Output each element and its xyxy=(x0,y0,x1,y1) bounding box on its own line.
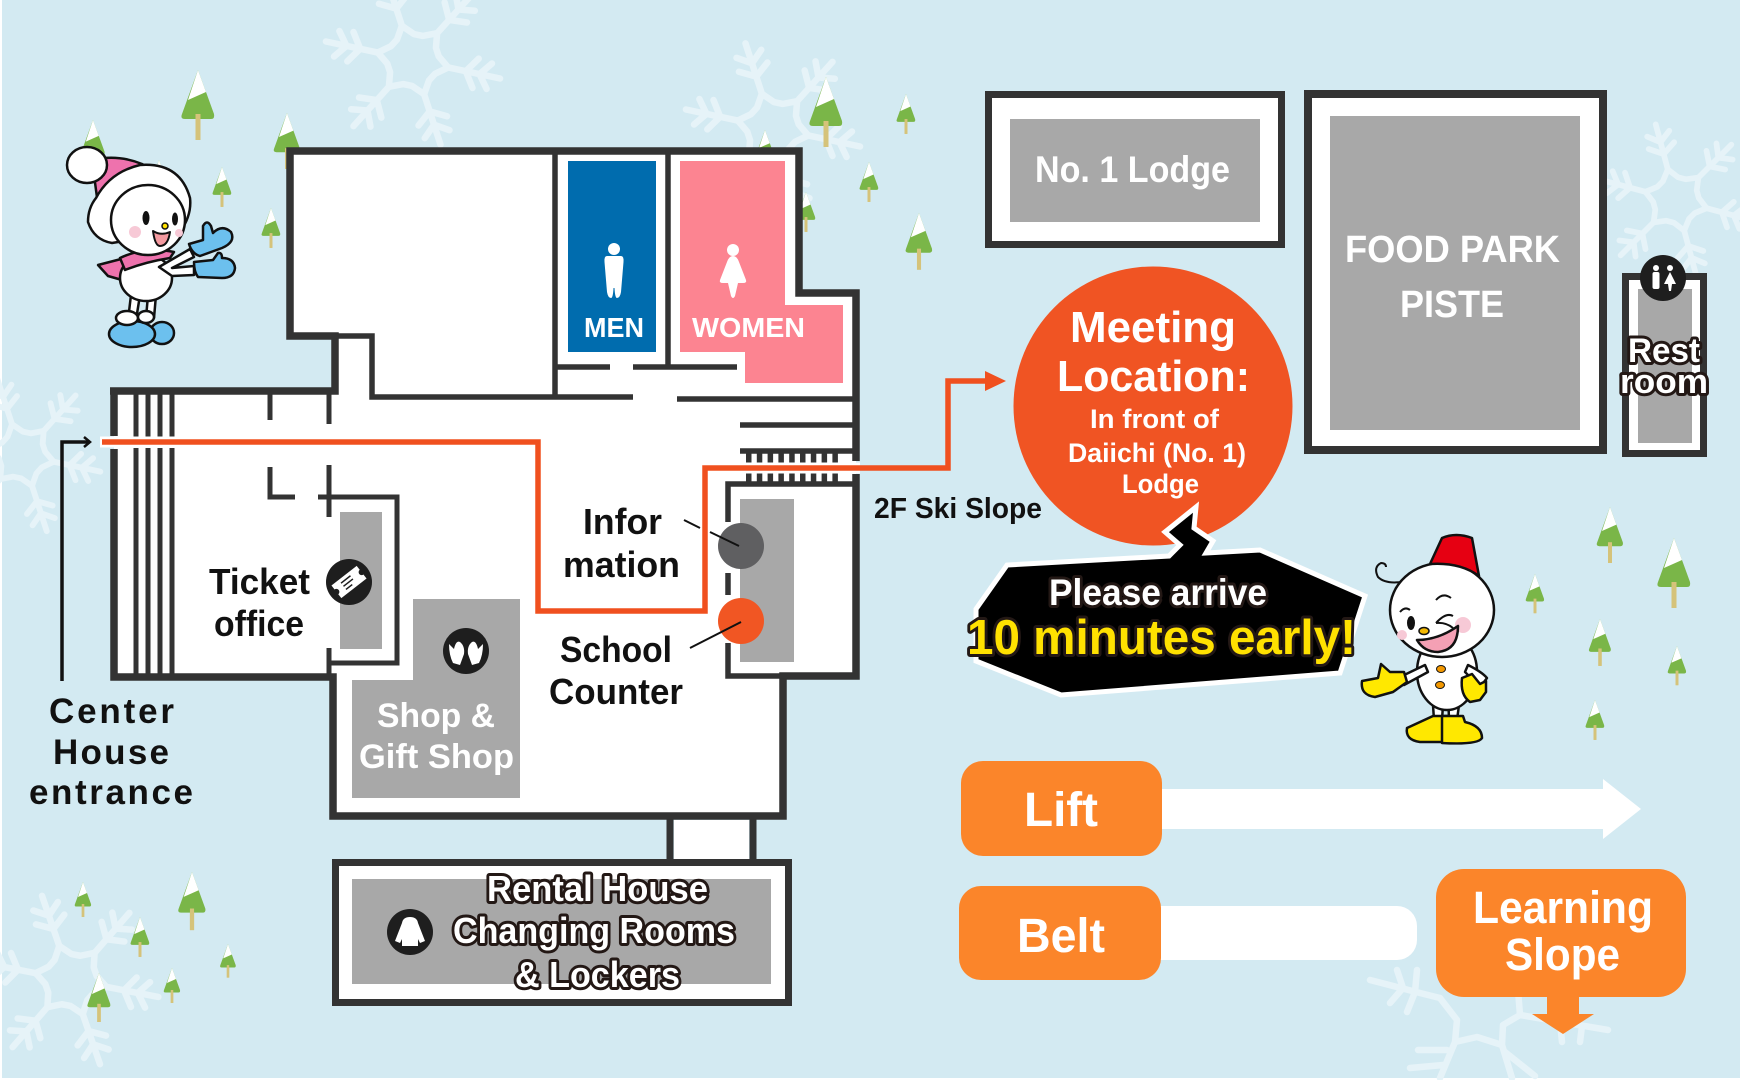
room: men xyxy=(568,161,656,352)
head xyxy=(1390,563,1494,657)
label: men: MEN xyxy=(584,312,644,343)
label: shop: Shop & xyxy=(377,697,495,735)
label: restroom xyxy=(1620,332,1708,401)
mittens xyxy=(189,222,232,256)
no. 1 lodge building: No. 1 Lodge xyxy=(1035,149,1230,190)
label: center house entrance: Center xyxy=(49,692,174,731)
cheeks xyxy=(129,226,141,238)
gloves xyxy=(1362,664,1407,697)
eyes xyxy=(142,211,150,225)
label: ticket office: office xyxy=(214,603,304,644)
body xyxy=(1417,634,1477,710)
callout: please arrive: 10 minutes early! xyxy=(967,611,1356,665)
information marker xyxy=(563,501,764,585)
route arrow xyxy=(100,371,1006,611)
belt bar xyxy=(959,886,1417,980)
label: information: mation xyxy=(563,544,680,585)
character: boy snowman xyxy=(1362,535,1494,743)
label: rental house: Changing Rooms xyxy=(453,910,735,951)
learning slope xyxy=(1436,869,1686,1034)
label: school counter: School xyxy=(560,629,672,670)
lift bar xyxy=(961,761,1641,856)
icon: woman xyxy=(720,244,746,298)
label: center house entrance xyxy=(29,692,193,812)
icon: mittens xyxy=(443,628,489,674)
learning slope: Learning xyxy=(1473,882,1653,933)
icon: jacket xyxy=(387,909,433,955)
label: rental house xyxy=(453,868,735,995)
ticket office xyxy=(209,559,372,644)
label: restroom: Rest xyxy=(1628,332,1700,370)
meeting location circle: In front of xyxy=(1090,404,1220,434)
arms xyxy=(159,249,194,276)
entrance arrow xyxy=(62,437,90,681)
cheeks xyxy=(1455,617,1471,633)
nose xyxy=(1419,628,1429,634)
label: center house entrance: entrance xyxy=(29,773,193,812)
eyes xyxy=(1407,616,1415,630)
arm xyxy=(1400,665,1428,685)
legs xyxy=(128,295,156,320)
boots xyxy=(150,322,174,344)
curl xyxy=(1376,563,1401,582)
label: center house entrance: House xyxy=(53,733,169,772)
walls xyxy=(110,151,856,816)
label: 2F ski slope: 2F Ski Slope xyxy=(874,493,1042,525)
label: rental house: Rental House xyxy=(487,868,708,909)
label: information: Infor xyxy=(583,501,662,542)
icon: ticket xyxy=(326,559,372,605)
mouth xyxy=(1417,626,1458,652)
building floor xyxy=(114,151,856,816)
meeting location circle xyxy=(1014,266,1292,546)
label: rental house: & Lockers xyxy=(515,954,680,995)
food park piste building: FOOD PARK xyxy=(1345,229,1561,271)
scarf xyxy=(120,250,174,270)
belt bar: Belt xyxy=(1017,910,1105,963)
meeting location circle: Daiichi (No. 1) xyxy=(1068,438,1246,468)
counter blocks xyxy=(340,499,794,798)
center house floor plan xyxy=(110,151,856,816)
label: shop xyxy=(359,697,514,776)
school counter marker xyxy=(549,598,764,712)
label: shop: Gift Shop xyxy=(359,738,514,776)
character: girl snowman xyxy=(67,147,235,347)
callout: please arrive: Please arrive xyxy=(1049,572,1267,613)
food park piste building xyxy=(1308,94,1603,450)
mouth xyxy=(153,231,170,246)
meeting location circle: Location: xyxy=(1057,352,1250,401)
hat xyxy=(92,158,165,205)
body xyxy=(120,255,172,301)
callout: please arrive xyxy=(967,507,1365,695)
label: school counter xyxy=(549,629,683,712)
label: ticket office xyxy=(209,561,310,644)
no. 1 lodge building xyxy=(988,94,1282,244)
rental house building xyxy=(336,816,788,1002)
icon: restroom xyxy=(1640,255,1686,301)
label: women: WOMEN xyxy=(692,312,805,343)
label: information xyxy=(563,501,680,585)
label: ticket office: Ticket xyxy=(209,561,310,602)
fur xyxy=(88,165,190,243)
meeting location circle: Meeting xyxy=(1070,303,1236,352)
connector corridor xyxy=(670,816,753,859)
nose xyxy=(162,223,168,229)
legs xyxy=(1432,690,1461,720)
face xyxy=(111,185,185,255)
fez xyxy=(1430,535,1479,576)
pompom xyxy=(67,147,107,183)
meeting location circle: Lodge xyxy=(1122,469,1199,499)
label: restroom: room xyxy=(1620,363,1708,401)
lift bar: Lift xyxy=(1024,784,1098,837)
label: school counter: Counter xyxy=(549,671,683,712)
buttons xyxy=(1436,666,1446,672)
food park piste building: PISTE xyxy=(1400,284,1504,326)
shop and gift shop xyxy=(359,628,514,776)
scarf tail xyxy=(98,258,125,280)
learning slope: Slope xyxy=(1505,929,1620,980)
room: women xyxy=(680,161,843,383)
icon: man xyxy=(604,243,624,298)
restroom building xyxy=(1620,255,1708,454)
boots xyxy=(1407,716,1448,742)
